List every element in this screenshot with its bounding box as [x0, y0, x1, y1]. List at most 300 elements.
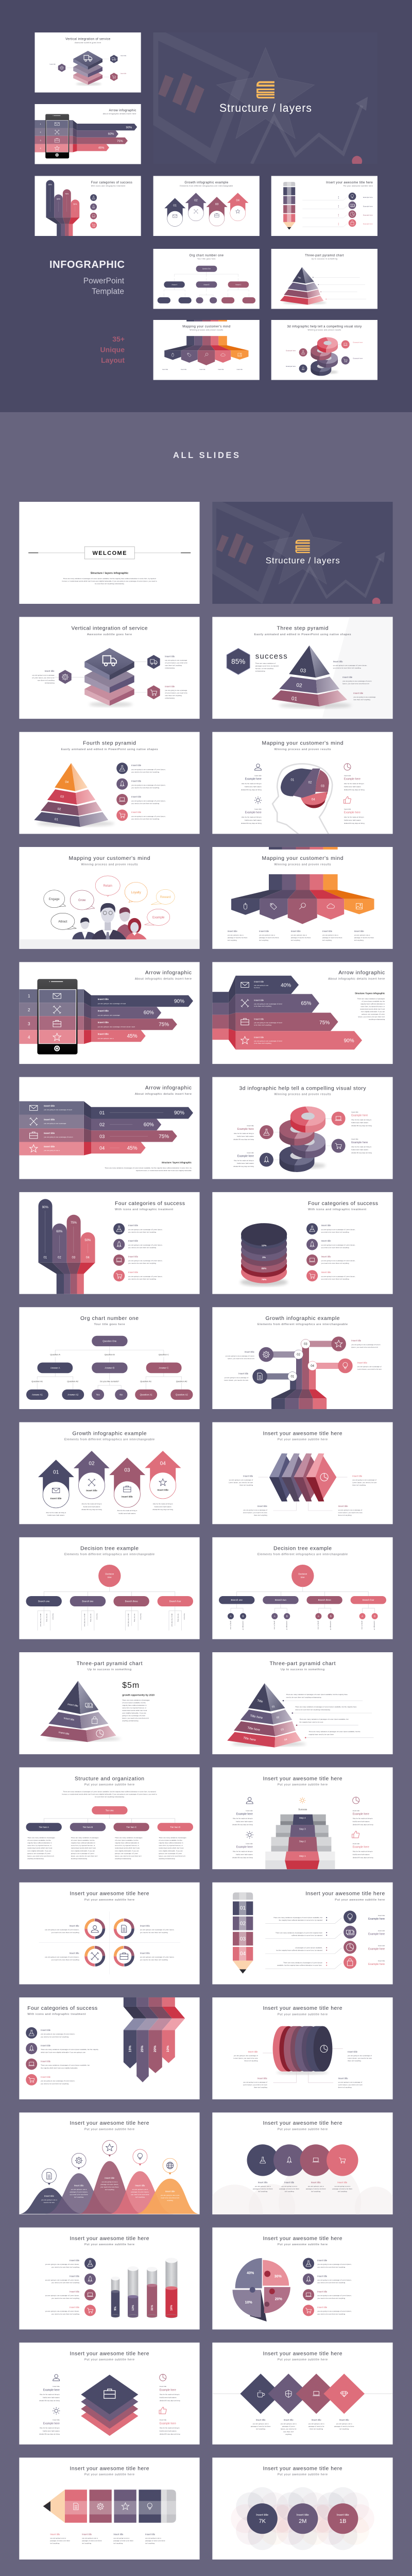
slide: decision tree one: Branch three [125, 1600, 138, 1603]
slide: stairs: Success [298, 1808, 307, 1810]
slide: discs: you are going to use a passage of [338, 2081, 362, 2083]
slide: flowers cross: Insert title [140, 1925, 150, 1927]
slide: four categories cylinder: Insert title [321, 1271, 331, 1274]
slide: puzzle: Put your awesome subtitle here [278, 2243, 328, 2246]
slide: stacked diamonds: Insert title [160, 2419, 166, 2421]
callout: 35+ unique layout: 35+ [112, 335, 125, 343]
slide: welcome: There are many variations of passages of Lorem Ipsum available, but the majority have suffered alteration in some form, by injected [63, 578, 156, 580]
slide: four part pyramid: majority have need to be sure there [309, 1733, 334, 1735]
slide: band arrow infographic: 60% [144, 1122, 154, 1128]
slide: circles row: Insert your awesome title here [263, 2121, 342, 2126]
slide: hills: you are going to use a you [161, 2194, 180, 2196]
slide: decision tree two: Elements from different infographics are interchangeable [258, 1553, 348, 1556]
slide: circles row: Put your awesome subtitle here [278, 2128, 328, 2131]
slide: tubes: Put your awesome subtitle here [84, 2243, 134, 2246]
slide: mapping ribbon: Insert title [354, 930, 364, 933]
slide: mapping ribbon: passage of need to be there [322, 937, 342, 939]
slide: flowers cross [19, 1883, 200, 1985]
slide: diamonds row: there isn't anything [310, 2428, 323, 2430]
slide: decision tree one: food text [183, 1614, 185, 1620]
slide: four categories fingers: 50% [84, 1239, 91, 1242]
slide: org chart: Answer A [50, 1367, 60, 1369]
slide: hills: need to be sure there isn't [161, 2197, 179, 2199]
slide: band arrow infographic: 02 [99, 1122, 105, 1127]
slide: four part pyramid: 03 [281, 1728, 284, 1732]
slide: four part pyramid: Title here [243, 1737, 256, 1742]
slide: growth arrows: 04 [160, 1461, 166, 1466]
mini slide: phone arrow infographic: 2 [40, 131, 41, 133]
mini slide: phone arrow infographic: 60% [108, 133, 114, 136]
slide: diamonds row: Insert your awesome title here [263, 2351, 342, 2357]
slide: structure and organization: anything embarrassing [71, 1858, 87, 1860]
slide: stairs: Example here [353, 1845, 369, 1849]
slide: growth arrows: fruitful were hath waters [47, 1514, 65, 1516]
mini slide: 3d donuts: Example here [286, 349, 296, 351]
slide: stairs: Also he his made air bring is [353, 1850, 373, 1852]
slide: stairs: Example here [236, 1845, 253, 1849]
slide: circles row: Insert title [258, 2181, 268, 2184]
slide: mapping brain: Example here [344, 778, 360, 781]
slide: vertical integration: of Lorem Ipsum, you need to be [165, 692, 187, 694]
slide: org chart: Question C [159, 1353, 169, 1356]
slide: ribbons four categories: Insert title [41, 2044, 51, 2047]
slide: stacked diamonds: Insert your awesome title here [70, 2351, 149, 2357]
slide: growth tree: Elements from different infographics are interchangeable [258, 1323, 348, 1326]
slide: growth arrows [19, 1422, 200, 1524]
slide: chevrons: there isn't anything [352, 1484, 366, 1486]
slide: chevrons: you are going to use a passage of [338, 1509, 362, 1511]
slide: vertical integration: of Lorem Ipsum, you need to be [165, 662, 187, 664]
slide: ribbons four categories: Insert title [41, 2029, 51, 2031]
slide: ribbons four categories: the majority which don't look even slightly believable [41, 2067, 78, 2069]
slide: three part pyramid with figure: There are many variations of passages [122, 1699, 150, 1701]
mini slide: four part pyramid: Up to success in something [312, 258, 337, 260]
slide: stairs: fruitful were hath waters [236, 1820, 253, 1822]
mini slide: 3d donuts: Example here [286, 365, 296, 367]
slide: vertical pencil: Example here [368, 1948, 385, 1951]
callout: 35+ unique layout: Unique [100, 345, 125, 353]
slide: petal circles: 1B [339, 2518, 347, 2524]
slide: mapping bubbles [19, 847, 200, 949]
slide: mapping bubbles: Example [152, 916, 165, 919]
mini slide: org chart: Org chart number one [189, 255, 224, 258]
slide: hills: you need to be sure there [131, 2194, 149, 2196]
slide: discs: Insert title [248, 2050, 258, 2053]
slide: puzzle: 20% [275, 2298, 283, 2301]
mini slide: growth arrows: Growth infographic example [184, 181, 229, 184]
slide: horizontal pencil: Put your awesome subtitle here [84, 2473, 134, 2477]
slide: structure and organization: majority have suffered alteration in [71, 1842, 95, 1844]
slide: stacked diamonds: fruitful were hath waters [160, 2430, 177, 2432]
slide: hills: anything [167, 2199, 173, 2201]
slide: structure and organization: anything embarrassing [159, 1858, 175, 1860]
slide: mapping brain: 01 [291, 779, 295, 782]
slide: horizontal pencil: you are going to use a [113, 2537, 129, 2539]
slide: org chart: Your title goes here [94, 1323, 125, 1326]
mini slide: mapping ribbon: Winning process and proven results [190, 329, 223, 331]
slide: 3d donuts: Also he his made air bring is [234, 1159, 254, 1161]
slide: circles row: you are going to use a [281, 2185, 297, 2188]
mini slide: phone arrow infographic: 3 [40, 140, 41, 142]
slide: fourth step pyramid: Insert title [131, 764, 142, 767]
slide: org chart: Do you like sunsets? [100, 1380, 119, 1382]
slide: phone arrow infographic: you are going to use a passage of lorem ipsum need [98, 1026, 135, 1028]
slide: fourth step pyramid: 03 [60, 795, 64, 799]
slide: vertical integration: embarrassing [165, 667, 175, 669]
slide: puzzle: 40% [247, 2272, 254, 2275]
slide: diamonds row: you are going to use a [281, 2422, 297, 2425]
mini slide: growth arrows [153, 176, 260, 236]
slide: stairs: Step 1 [299, 1855, 306, 1857]
slide: org chart: Question A [50, 1353, 60, 1356]
slide: org chart: No [119, 1394, 123, 1396]
slide: four part pyramid: Three-part pyramid chart [270, 1661, 336, 1667]
slide: org chart: Yes [96, 1394, 100, 1396]
slide: horizontal pencil: Insert your awesome title here [70, 2466, 149, 2472]
slide: vertical integration: Vertical integration of service [72, 625, 148, 631]
slide: phone arrow infographic: Insert title [98, 1033, 109, 1036]
heading: powerpoint template: PowerPoint [83, 277, 125, 285]
mini slide: mapping ribbon: Insert title [237, 368, 243, 370]
slide: org chart: Answer C [159, 1367, 168, 1369]
slide: large arrow infographic: 90% [344, 1038, 354, 1044]
slide: chevrons: you are going to use a passage of [352, 1479, 376, 1481]
slide: org chart: Question A2 [67, 1380, 79, 1382]
mini slide: four categories [35, 176, 141, 236]
slide: decision tree one: food text [96, 1614, 98, 1620]
mini slide: mapping ribbon [153, 320, 260, 380]
slide: large arrow infographic: you are going to use [254, 985, 269, 987]
slide: diamonds row: you are going to use a [308, 2422, 324, 2425]
slide: mapping ribbon: isn't anything [259, 939, 268, 941]
slide: growth tree: 04 [311, 1365, 315, 1368]
slide: vertical pencil: Example here [368, 1963, 385, 1966]
mini slide: four categories: Four categories of success [91, 181, 132, 184]
slide: growth arrows: Also he his made air bring is [82, 1503, 102, 1505]
slide: tubes: 31% [151, 2305, 154, 2311]
slide: vertical integration: sure there isn't anything [165, 694, 182, 697]
slide: mapping brain: 04 [312, 799, 315, 802]
slide: decision tree two: going to use [273, 1621, 276, 1630]
slide: four categories fingers: Insert title [128, 1271, 139, 1274]
slide: diamonds row: you are going to use a [336, 2422, 352, 2425]
slide: mapping ribbon: passage of need to be there [259, 937, 279, 939]
slide: horizontal pencil: you are going to use a [145, 2537, 161, 2539]
slide: 3d donuts: divided fill may days air bring [233, 1139, 254, 1141]
mini slide: phone arrow infographic: 1 [40, 123, 41, 125]
slide: three part pyramid with figure: Insert title [58, 1731, 70, 1736]
slide: structure and organization: humour, or randomised words which don't look even slightly believable. If you are going to use a passage of Lorem Ipsum, you need to [62, 1793, 157, 1795]
slide: growth tree: 03 [304, 1343, 307, 1346]
slide: structure and organization: randomised words which don't look [159, 1847, 184, 1849]
slide: stacked diamonds: Example here [160, 2422, 176, 2425]
slide: structure and organization: Tier two D [170, 1826, 180, 1828]
slide: stacked diamonds: divided fill may days air bring [39, 2399, 60, 2401]
slide: four categories fingers: 90% [42, 1206, 48, 1209]
slide: stacked diamonds: fruitful were hath waters [43, 2396, 60, 2398]
slide: mapping brain: Also he his made air bring is [242, 783, 262, 785]
slide: four part pyramid [212, 1652, 393, 1754]
mini slide: four categories: 75% [65, 193, 68, 195]
slide: diamonds row: Insert title [284, 2418, 294, 2421]
slide: mapping brain: Mapping your customer's mind [262, 741, 344, 747]
slide: diamonds row: sure there isn't [283, 2431, 294, 2433]
mini slide: 3d donuts: Winning process and proven results [307, 329, 341, 331]
slide: chevrons: Lorem Ipsum, you need to be sure [338, 1512, 363, 1514]
slide: four categories cylinder: With icons and infographic treatment [308, 1208, 366, 1211]
slide: decision tree two: Branch three [318, 1599, 331, 1601]
slide: decision tree one: Branch two [82, 1600, 94, 1603]
slide: ribbons four categories: 10% [166, 2045, 170, 2052]
slide: 3d donuts: Winning process and proven results [274, 1093, 331, 1096]
slide: three part pyramid with figure: $5m [122, 1681, 139, 1690]
slide: stairs: Step 3 [299, 1827, 306, 1830]
heading: powerpoint template: Template [92, 287, 124, 296]
slide: chevrons: Put your awesome subtitle here [278, 1438, 328, 1441]
slide: three step pyramid: Insert title [353, 692, 364, 694]
slide: band arrow infographic: injected humour, or randomised words which don't look even slightly believable [136, 1170, 192, 1172]
slide: mapping brain: Insert title [344, 808, 351, 810]
mini slide: growth arrows: 04 [236, 199, 240, 202]
slide: four part pyramid: 02 [276, 1716, 280, 1720]
slide: vertical pencil: Put your awesome subtitle here [335, 1899, 385, 1902]
slide: stairs: Step 2 [299, 1840, 306, 1842]
slide: diamonds row: you are going to use a [253, 2422, 269, 2425]
slide: decision tree one: not too long [134, 1614, 136, 1622]
slide: four categories cylinder: you are going to use a passage of Lorem Ipsum, [321, 1244, 355, 1246]
slide: puzzle: Insert title [317, 2291, 328, 2293]
slide: mapping ribbon: you are going to use a [259, 934, 275, 936]
slide: stairs: Insert your awesome title here [263, 1776, 342, 1782]
heading: all slides: ALL SLIDES [173, 451, 239, 460]
slide: flowers cross: Insert title [70, 1925, 79, 1927]
mini slide: 3d donuts: Example here [353, 342, 363, 344]
slide: diamonds row: passage of need to be there [334, 2425, 354, 2427]
mini slide: mapping ribbon: Mapping your customer's mind [182, 326, 230, 329]
slide: decision tree one: not too long [177, 1614, 179, 1622]
slide: structure and organization: There are many variations of passages of Lorem Ipsum available, but the majority have suffered alteration in some form, by injected [63, 1790, 156, 1792]
slide: hills: passage of Lorem Ipsum, [131, 2191, 149, 2193]
slide: circles row: you are going to use a [334, 2185, 350, 2188]
slide: large arrow infographic: majority have suffered alteration in [360, 1003, 385, 1005]
slide: stacked diamonds: Example here [43, 2422, 60, 2425]
slide: puzzle: you need to be sure there isn't anything [317, 2266, 346, 2268]
slide: diamonds row: passage of Lorem [282, 2425, 295, 2427]
slide: growth arrows: Insert title [122, 1495, 133, 1498]
slide: growth arrows: 03 [124, 1467, 130, 1473]
slide: org chart: Answer A2 [67, 1394, 79, 1396]
slide: decision tree two: a passage of [242, 1621, 244, 1630]
slide: horizontal pencil: isn't anything [113, 2543, 123, 2545]
slide: hills: Insert title [105, 2177, 115, 2179]
slide: three part pyramid with figure [19, 1652, 200, 1754]
mini slide: org chart: Answer C [235, 283, 241, 285]
slide: chevrons: Lorem Ipsum, you need to be sure [229, 1481, 253, 1483]
slide: circles row: Insert title [337, 2181, 348, 2184]
slide: structure and organization: Ipsum, you need to be sure there isn't [159, 1855, 185, 1857]
slide: mapping brain: fruitful were hath waters [245, 819, 262, 821]
slide: structure and organization: majority have suffered alteration in [159, 1842, 183, 1844]
slide: large arrow infographic: even slightly believable. If you are [361, 1011, 385, 1013]
slide: fourth step pyramid: Insert title [131, 795, 142, 798]
slide: phone arrow infographic: 2 [28, 1008, 30, 1012]
slide: four categories fingers: 01 [43, 1256, 47, 1259]
slide: growth arrows: 01 [53, 1469, 59, 1475]
slide: phone arrow infographic: 1 [28, 994, 30, 998]
slide: mapping brain: Winning process and proven results [274, 748, 331, 751]
slide: discs: there isn't anything [254, 2086, 267, 2088]
slide: circles row: passage of need to be there [279, 2188, 299, 2190]
slide: discs: you are going to use a passage of [348, 2055, 372, 2057]
slide: diamonds row: anything [285, 2433, 291, 2435]
slide: ribbons four categories: Insert title [41, 2076, 51, 2078]
slide: stairs: Insert title [353, 1809, 359, 1811]
slide: org chart: Question A2 [176, 1380, 187, 1382]
mini slide: 3d donuts [271, 320, 377, 380]
slide: vertical integration: sure there isn't anything [165, 664, 182, 666]
slide: fourth step pyramid: you need to be sure there isn't anything [131, 802, 159, 804]
slide: phone arrow infographic: 90% [174, 999, 184, 1005]
slide: decision tree two: B [330, 1615, 332, 1618]
slide: vertical integration: of Lorem Ipsum, you need to be [32, 676, 55, 679]
slide: four categories fingers: you are going to use a passage of Lorem Ipsum, [128, 1228, 163, 1230]
slide: tubes: Insert title [70, 2306, 80, 2309]
slide: structure and organization: of Lorem Ipsum available, but the [27, 1839, 51, 1841]
slide: fourth step pyramid: you are going to use a passage of Lorem Ipsum, [131, 800, 166, 802]
slide: band arrow infographic: Insert title [44, 1132, 55, 1134]
slide: three part pyramid with figure: randomised words which don't look [122, 1709, 147, 1711]
slide: phone arrow infographic: Insert title [98, 1021, 109, 1024]
slide: four categories fingers: you need to be sure there isn't anything [128, 1231, 156, 1233]
slide: vertical pencil: Example here [368, 1918, 385, 1921]
mini slide: pencil: Example here [363, 214, 373, 216]
slide: vertical integration: you are going to use a passage [165, 689, 187, 691]
slide: hills: need to be sure [44, 2201, 55, 2204]
slide: large arrow infographic: Arrow infographic [338, 970, 385, 976]
slide: four part pyramid: Title here [247, 1726, 261, 1732]
slide: three part pyramid with figure: going to use a passage of Lorem [122, 1715, 146, 1717]
slide: growth arrows: divided fill may days air bring [152, 1509, 173, 1511]
slide: discs: you are going to use a passage of [234, 2055, 258, 2057]
slide: phone arrow infographic: you are going to use a passage of need [98, 1003, 126, 1005]
slide: large arrow infographic: Structure / layers infographic [355, 992, 385, 995]
slide: vertical integration: you are going to use a passage [165, 659, 187, 661]
slide: diamonds row: Insert title [339, 2418, 349, 2421]
slide: large arrow infographic: anything embarrassing [369, 1019, 385, 1021]
slide: four categories cylinder: 12% [262, 1244, 267, 1247]
slide: three step pyramid: 01 [291, 696, 298, 702]
slide: 3d donuts: Insert title [351, 1111, 358, 1113]
slide: mapping brain: 02 [308, 782, 312, 785]
slide: 3d donuts: fruitful were hath waters [237, 1136, 254, 1138]
slide: stairs: Also he his made air bring is [233, 1817, 253, 1819]
slide: four categories fingers: Four categories of success [115, 1201, 185, 1207]
slide: decision tree two: a passage of [373, 1621, 375, 1630]
slide: four categories cylinder: Four categories of success [308, 1201, 378, 1207]
slide: four categories cylinder: you need to be sure there isn't anything [321, 1247, 349, 1249]
slide: puzzle: 10% [245, 2301, 252, 2304]
slide: decision tree two: a passage of [286, 1621, 288, 1630]
slide: band arrow infographic: you are going to use a passage of Lorem [44, 1136, 73, 1138]
slide: tubes: Insert title [70, 2259, 80, 2262]
slide: structure and organization: some form, by injected humour, or [71, 1844, 95, 1846]
slide: diamonds row: Ipsum, you need to be [281, 2428, 297, 2430]
slide: growth tree: Insert title [238, 1372, 249, 1375]
slide: horizontal pencil: you are going to use a [82, 2537, 98, 2539]
slide: horizontal pencil: isn't anything [82, 2543, 91, 2545]
slide: band arrow infographic: Insert title [44, 1105, 55, 1107]
slide: diamonds row [212, 2343, 393, 2445]
slide: vertical pencil: suffered alteration in some form, by injected [291, 1934, 322, 1936]
slide: tubes: you need to be sure there isn't anything [52, 2266, 79, 2268]
slide: band arrow infographic: 01 [99, 1110, 105, 1115]
slide: vertical integration: Insert title [165, 655, 175, 657]
slide: vertical integration: Insert title [165, 685, 175, 688]
slide: flowers cross: you are going to use a passage of Lorem Ipsum, [140, 1929, 174, 1931]
slide: band arrow infographic: you are going to use a [44, 1149, 60, 1151]
slide: vertical pencil: Insert title [378, 1929, 385, 1931]
slide: stairs: fruitful were hath waters [353, 1820, 370, 1822]
slide: decision tree one: food text [52, 1614, 54, 1620]
slide: puzzle [212, 2228, 393, 2330]
slide: fourth step pyramid: you are going to use a passage of Lorem Ipsum, [131, 784, 166, 786]
mini slide: phone arrow infographic: About infographic details insert here [103, 113, 136, 115]
slide: structure and organization: some form, by injected humour, or [27, 1844, 52, 1846]
mini slide: 3d donuts: Example here [353, 358, 363, 360]
slide: large arrow infographic: Insert title [254, 999, 264, 1002]
slide: band arrow infographic: 90% [174, 1110, 184, 1116]
slide: ribbons four categories: you are going to use a passage of Lorem Ipsum, [41, 2033, 75, 2035]
slide: 3d donuts: Example here [351, 1114, 368, 1117]
slide: tubes: Insert your awesome title here [70, 2236, 149, 2242]
slide: discs: Lorem Ipsum, you need to be sure [243, 2083, 267, 2086]
slide: three part pyramid with figure: Insert title [63, 1717, 75, 1722]
slide: org chart: Org chart number one [80, 1316, 139, 1321]
mini slide: four part pyramid: Three-part pyramid chart [305, 255, 344, 258]
slide: band arrow infographic: About infographic details insert here [135, 1093, 192, 1096]
slide: large arrow infographic: of Lorem Ipsum available but the [362, 1001, 385, 1003]
slide: ribbons four categories: 20% [153, 2045, 157, 2052]
slide: four categories cylinder: you need to be sure there isn't anything [321, 1231, 349, 1233]
slide: diamonds row: Insert title [256, 2418, 266, 2421]
slide: mapping brain: Example here [245, 778, 262, 781]
slide: stacked diamonds: Put your awesome subtitle here [84, 2358, 134, 2361]
slide: mapping ribbon: isn't anything [228, 939, 237, 941]
slide: mapping ribbon: Insert title [228, 930, 237, 933]
slide: stairs: divided fill may days air bring [353, 1856, 373, 1858]
slide: horizontal pencil: passage of need to be there [50, 2540, 70, 2542]
slide: structure and organization: even slightly believable. If you are [27, 1850, 52, 1852]
slide: phone arrow infographic: 45% [127, 1033, 138, 1039]
slide: vertical pencil: There are many variations of passages of Lorem the majority have [276, 1931, 322, 1934]
slide: hills: you are going to use a [71, 2189, 87, 2191]
slide: mapping ribbon: isn't anything [354, 939, 364, 941]
slide: four categories cylinder: 76% [262, 1278, 267, 1281]
slide: growth arrows: Elements from different infographics are interchangeable [64, 1438, 154, 1441]
slide: four categories cylinder: Insert title [321, 1256, 331, 1258]
slide: puzzle: you are going to use a passage of Lorem Ipsum, [317, 2310, 352, 2312]
slide: three part pyramid with figure: Ipsum, you need to be sure there isn't [122, 1717, 149, 1719]
slide: large arrow infographic: be there [254, 987, 260, 989]
slide: vertical pencil [212, 1883, 393, 1985]
slide: three part pyramid with figure: growth opportunity by 2020 [122, 1693, 154, 1697]
slide: decision tree one: Decision tree example [80, 1546, 139, 1552]
slide: three step pyramid: you are going to use a passage of Lorem [342, 680, 372, 682]
slide: flowers cross: you need to be sure there isn't anything [140, 1959, 168, 1961]
slide: decision tree one: tree [108, 1576, 112, 1579]
slide: puzzle: you need to be sure there isn't anything [317, 2297, 346, 2299]
slide: stacked diamonds: fruitful were hath waters [160, 2396, 177, 2398]
